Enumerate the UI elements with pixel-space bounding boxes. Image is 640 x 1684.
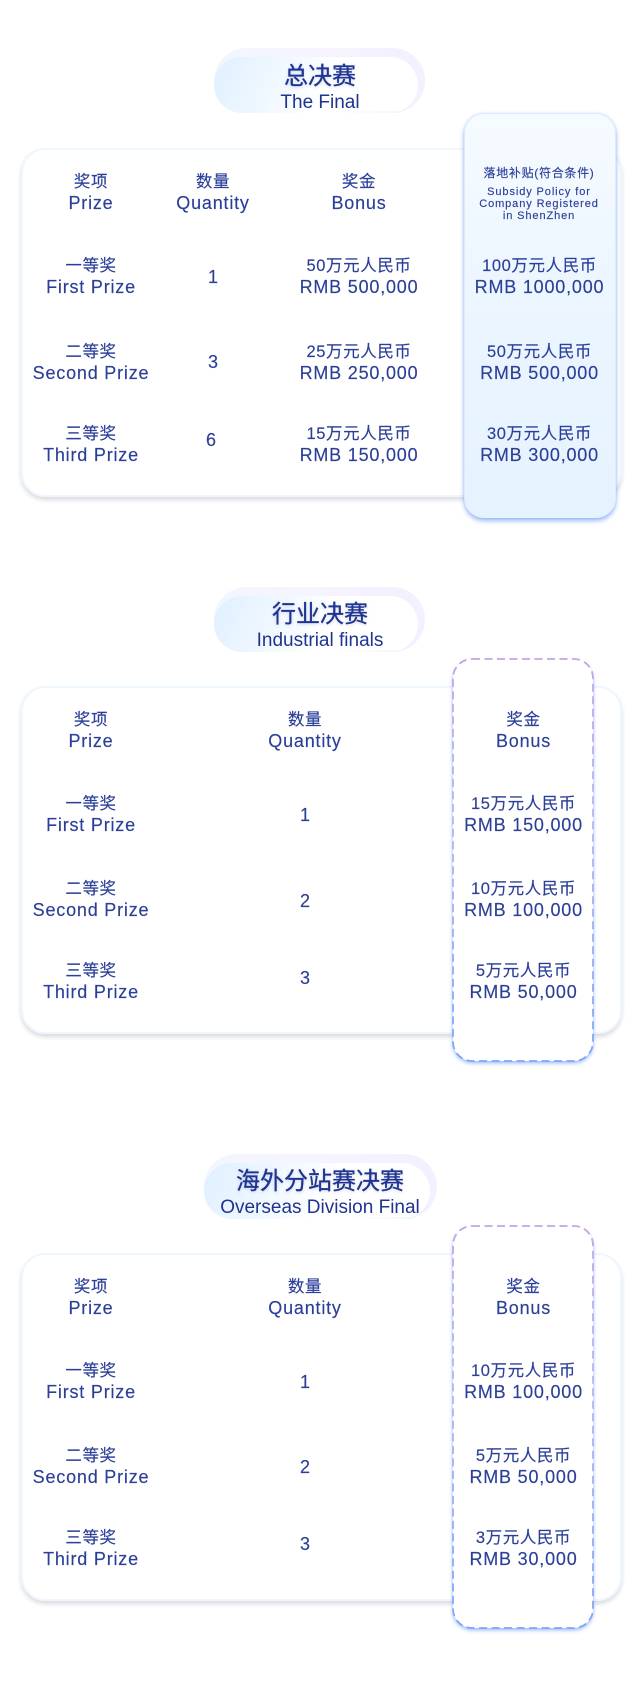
row: first prize bonus: 10万元人民币 — [471, 1362, 576, 1380]
row: first prize name — [46, 794, 136, 834]
row: first prize name: 一等奖 — [65, 795, 117, 813]
table card: overseas division final — [21, 1253, 622, 1601]
row: second prize name: Second Prize — [33, 362, 149, 382]
dashed bonus column panel — [450, 658, 596, 1066]
row: third prize bonus: 3万元人民币 — [476, 1529, 571, 1547]
row: first prize bonus: RMB 500,000 — [300, 276, 418, 296]
header: subsidy: Subsidy Policy for — [487, 186, 591, 198]
table card: the final — [21, 148, 622, 497]
row: first prize name: 一等奖 — [65, 257, 117, 275]
row: third prize bonus: RMB 150,000 — [300, 444, 418, 464]
title pill: the final — [214, 48, 425, 113]
header: quantity: 数量 — [288, 1278, 322, 1296]
subtitle: Overseas Division Final: Overseas Division Final — [220, 1197, 420, 1218]
row: first prize bonus — [464, 1362, 583, 1402]
row: second prize subsidy: RMB 500,000 — [480, 362, 599, 382]
row: first prize bonus: 50万元人民币 — [306, 257, 412, 275]
row: second prize quantity: 2 — [300, 891, 310, 911]
header: prize: Prize — [68, 192, 114, 212]
row: first prize name: First Prize — [46, 814, 136, 834]
row: second prize quantity: 3 — [208, 352, 218, 372]
header: quantity: Quantity — [268, 1298, 342, 1318]
row: second prize subsidy: 50万元人民币 — [487, 343, 592, 361]
row: first prize bonus: 15万元人民币 — [471, 795, 576, 813]
row: second prize bonus: 10万元人民币 — [471, 880, 576, 898]
row: third prize name — [43, 962, 139, 1002]
row: second prize name — [33, 1446, 149, 1486]
header: prize: 奖项 — [74, 173, 108, 191]
row: second prize bonus — [464, 880, 583, 920]
dashed bonus column panel — [450, 1225, 596, 1633]
row: third prize bonus — [300, 424, 418, 464]
header: bonus: 奖金 — [342, 173, 376, 191]
header: bonus — [331, 172, 387, 212]
row: first prize name: 一等奖 — [65, 1362, 117, 1380]
header: prize — [68, 710, 114, 750]
row: third prize bonus — [469, 1528, 578, 1568]
row: second prize name — [33, 342, 149, 382]
row: third prize subsidy: 30万元人民币 — [487, 425, 592, 443]
row: third prize name — [43, 424, 139, 464]
header: quantity: 数量 — [288, 711, 322, 729]
row: second prize bonus: 25万元人民币 — [306, 343, 412, 361]
header: quantity: Quantity — [268, 730, 342, 750]
header: prize — [68, 1278, 114, 1318]
row: first prize bonus — [300, 256, 418, 296]
row: first prize bonus — [464, 794, 583, 834]
row: second prize name: 二等奖 — [65, 1447, 117, 1465]
row: third prize name: Third Prize — [43, 444, 139, 464]
title: 海外分站赛决赛: 海外分站赛决赛 — [236, 1168, 404, 1195]
header: bonus: 奖金 — [506, 1278, 541, 1296]
subtitle: The Final: The Final — [280, 92, 360, 113]
row: first prize quantity: 1 — [208, 267, 218, 287]
row: third prize quantity: 6 — [206, 430, 216, 450]
row: second prize bonus: RMB 50,000 — [469, 1466, 578, 1486]
row: second prize bonus: 5万元人民币 — [476, 1447, 571, 1465]
header: prize — [68, 172, 114, 212]
row: second prize name: Second Prize — [33, 900, 149, 920]
row: second prize bonus — [469, 1446, 578, 1486]
row: third prize name — [43, 1528, 139, 1568]
row: third prize bonus: RMB 30,000 — [469, 1548, 578, 1568]
row: first prize subsidy — [475, 256, 604, 296]
row: first prize name: First Prize — [46, 276, 136, 296]
row: second prize name: 二等奖 — [65, 343, 117, 361]
row: third prize name: Third Prize — [43, 1548, 139, 1568]
row: third prize quantity: 3 — [300, 968, 310, 988]
row: third prize subsidy — [480, 424, 599, 464]
row: third prize bonus: 5万元人民币 — [476, 962, 571, 980]
row: second prize name — [33, 880, 149, 920]
header: subsidy — [479, 166, 599, 222]
row: second prize quantity: 2 — [300, 1457, 310, 1477]
row: second prize bonus: RMB 100,000 — [464, 900, 583, 920]
row: third prize bonus: RMB 50,000 — [469, 982, 578, 1002]
header: quantity: Quantity — [176, 192, 250, 212]
row: third prize subsidy: RMB 300,000 — [480, 444, 599, 464]
subtitle: Industrial finals: Industrial finals — [257, 630, 383, 651]
header: bonus: Bonus — [496, 730, 551, 750]
header: prize: Prize — [68, 1298, 114, 1318]
row: third prize bonus: 15万元人民币 — [306, 425, 412, 443]
row: first prize subsidy: RMB 1000,000 — [475, 276, 604, 296]
section: industrial finals — [20, 587, 624, 1066]
row: first prize bonus: RMB 100,000 — [464, 1382, 583, 1402]
header: quantity — [176, 172, 250, 214]
row: third prize bonus — [469, 962, 578, 1002]
title pill: overseas division final — [204, 1154, 437, 1219]
table card: industrial finals — [21, 686, 622, 1034]
header: subsidy: 落地补贴(符合条件) — [484, 166, 594, 180]
header: bonus: 奖金 — [506, 711, 541, 729]
header: subsidy: in ShenZhen — [503, 210, 575, 222]
highlighted subsidy column panel — [464, 113, 616, 518]
row: first prize name: First Prize — [46, 1382, 136, 1402]
header: quantity — [268, 1278, 342, 1318]
header: bonus — [496, 1278, 551, 1318]
row: second prize subsidy — [480, 342, 599, 382]
row: third prize quantity: 3 — [300, 1534, 310, 1554]
title: 总决赛: 总决赛 — [284, 63, 356, 90]
header: prize: 奖项 — [74, 1278, 108, 1296]
row: first prize subsidy: 100万元人民币 — [482, 257, 597, 275]
section: overseas division final — [20, 1154, 624, 1633]
title pill: industrial finals — [214, 587, 425, 652]
row: first prize bonus: RMB 150,000 — [464, 814, 583, 834]
header: quantity: 数量 — [196, 173, 230, 191]
row: third prize name: Third Prize — [43, 982, 139, 1002]
row: second prize name: 二等奖 — [65, 880, 117, 898]
row: second prize name: Second Prize — [33, 1466, 149, 1486]
row: first prize quantity: 1 — [300, 805, 310, 825]
header: prize: 奖项 — [74, 711, 108, 729]
row: second prize bonus — [300, 342, 418, 382]
header: bonus: Bonus — [331, 192, 387, 212]
section: the final — [20, 48, 624, 524]
header: bonus: Bonus — [496, 1298, 551, 1318]
header: prize: Prize — [68, 730, 114, 750]
title: 行业决赛: 行业决赛 — [272, 601, 368, 628]
row: first prize quantity: 1 — [300, 1372, 310, 1392]
row: first prize name — [46, 1362, 136, 1402]
row: third prize name: 三等奖 — [65, 1529, 117, 1547]
header: subsidy: Company Registered — [479, 198, 599, 210]
row: second prize bonus: RMB 250,000 — [300, 362, 418, 382]
row: third prize name: 三等奖 — [65, 425, 117, 443]
header: bonus — [496, 710, 551, 750]
row: third prize name: 三等奖 — [65, 962, 117, 980]
header: quantity — [268, 710, 342, 752]
row: first prize name — [46, 256, 136, 296]
